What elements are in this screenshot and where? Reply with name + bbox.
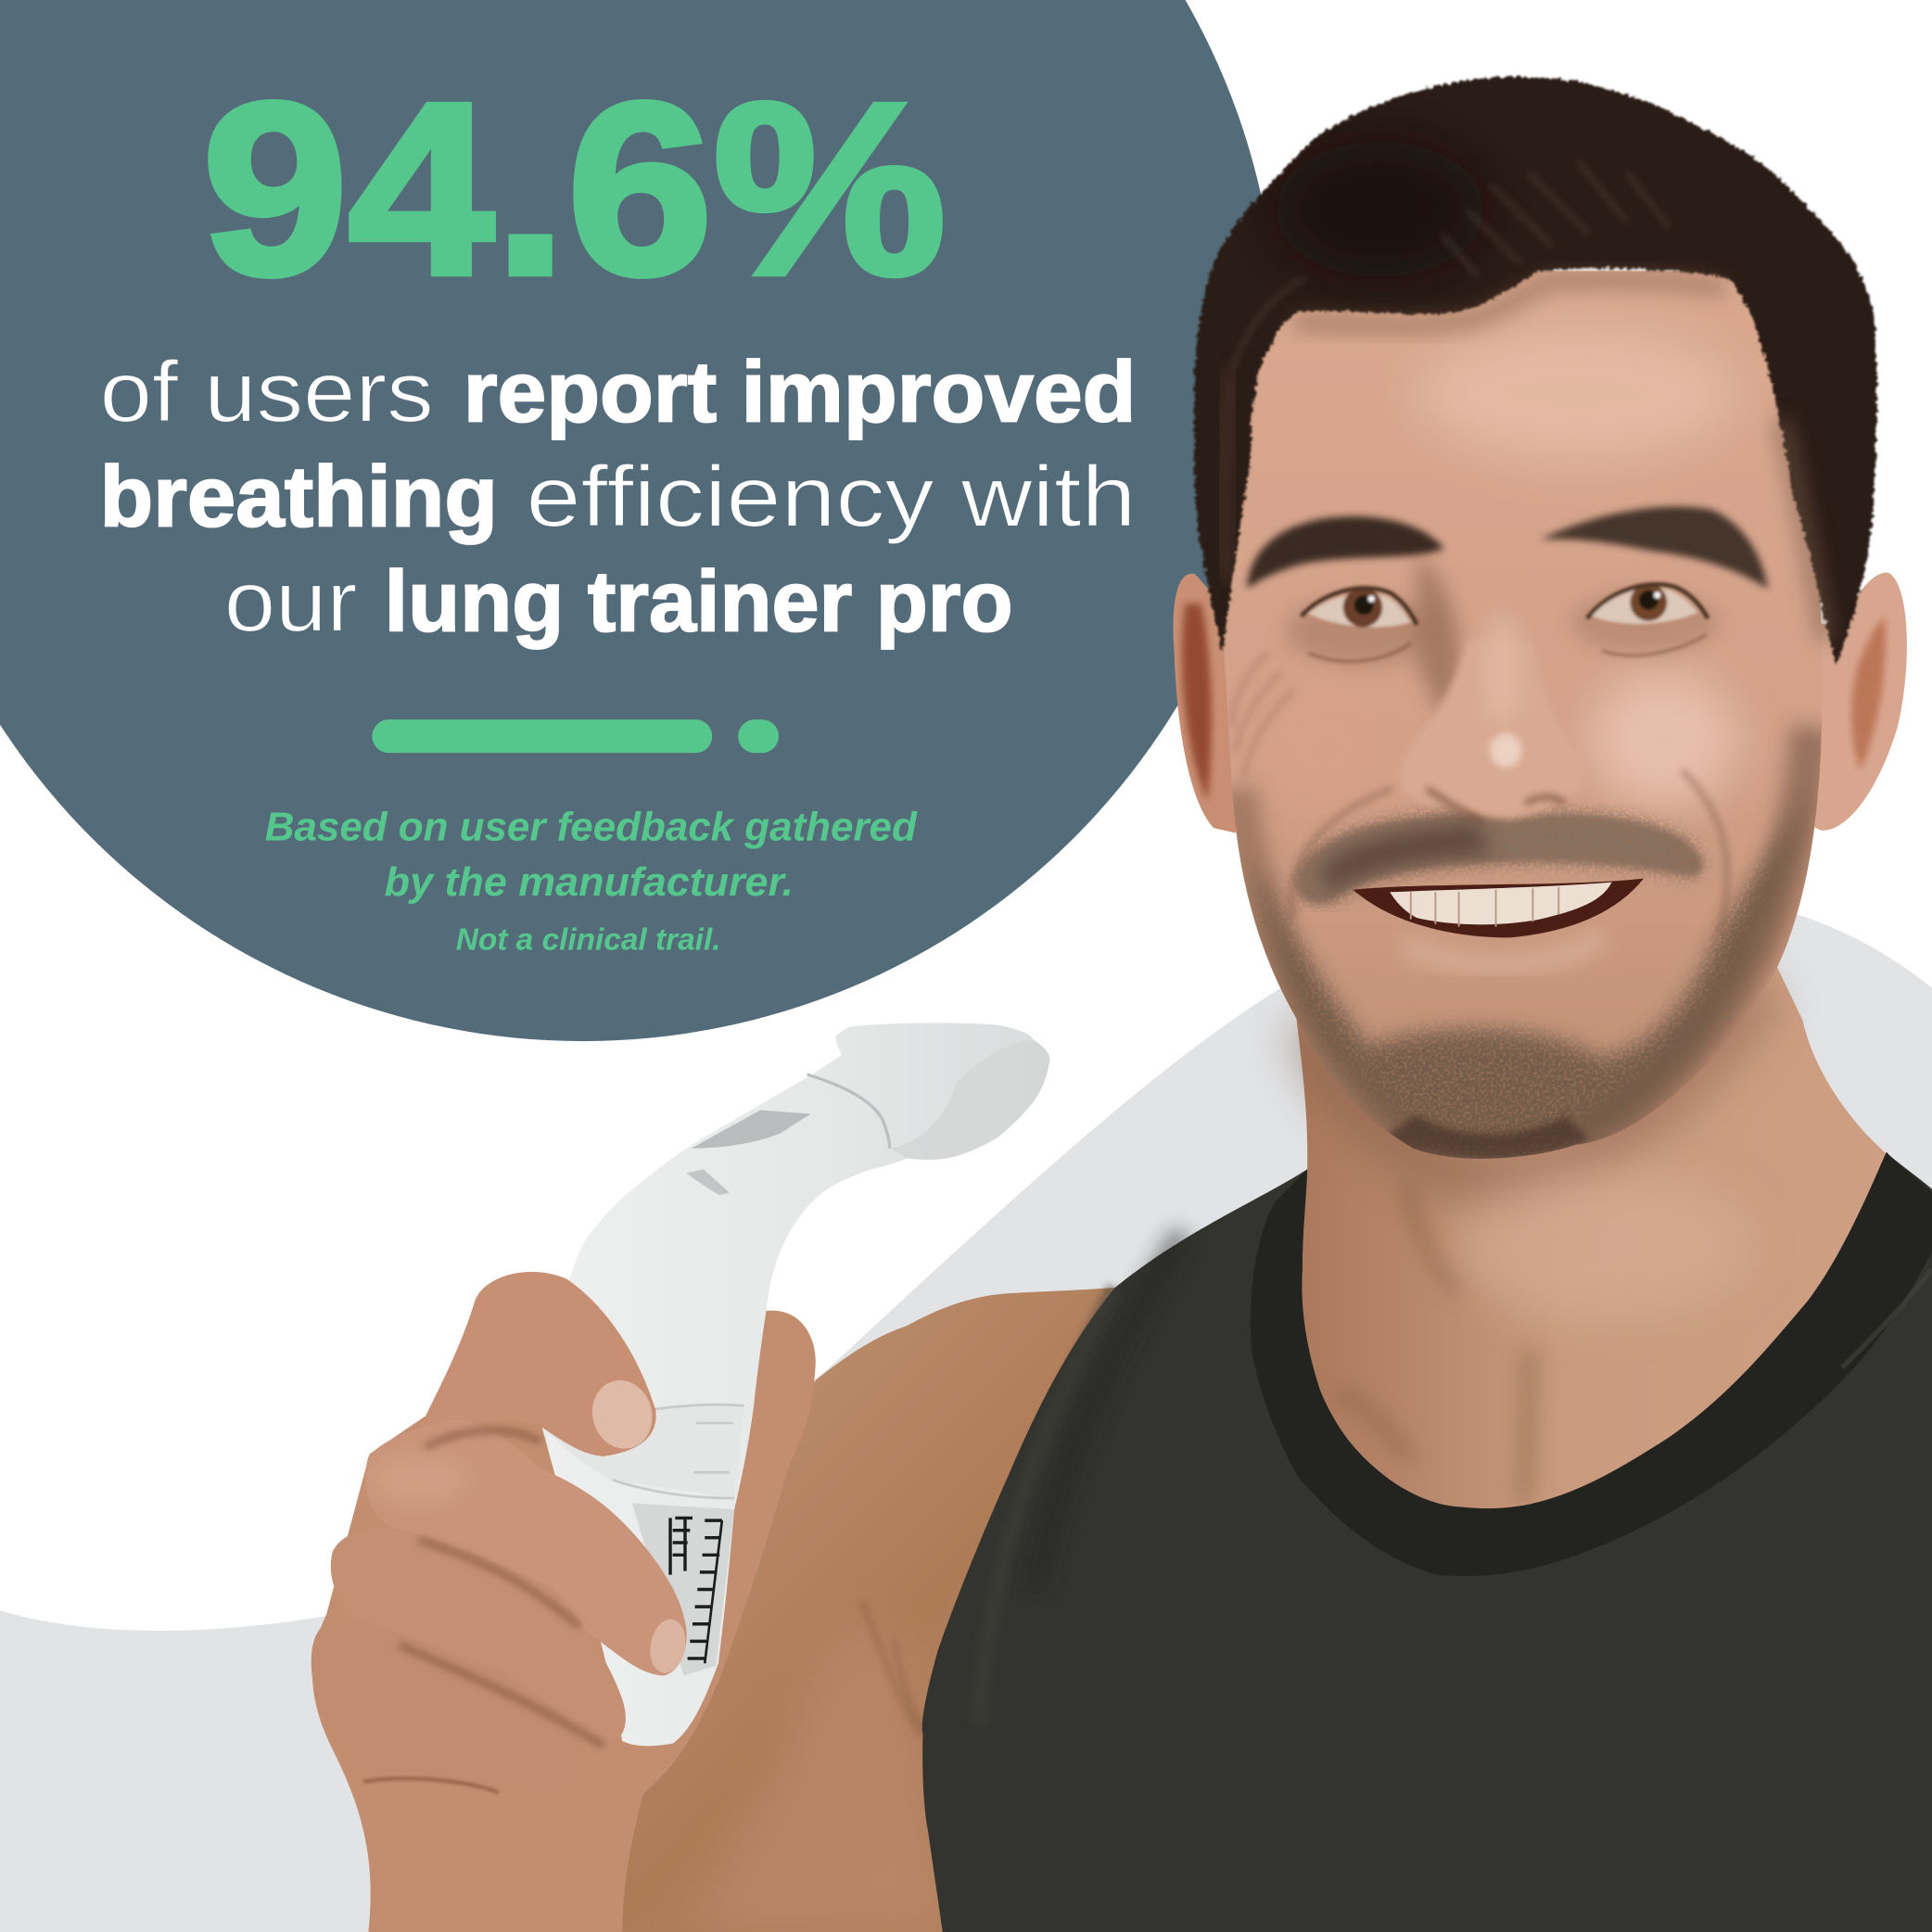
statement text: breathing — [100, 449, 498, 545]
statement text: efficiency with — [527, 449, 1136, 545]
disclaimer text — [265, 804, 918, 958]
device: slot — [686, 1169, 730, 1195]
man: smile — [1353, 879, 1644, 965]
man: right eye — [1587, 584, 1708, 655]
device: mouthpiece shading — [890, 1040, 1049, 1160]
device: lower band — [540, 1405, 744, 1498]
statement text: report improved — [464, 344, 1136, 440]
hand: fingers — [311, 1272, 690, 1797]
stubble — [1262, 833, 1781, 1159]
man: neck and chest — [1281, 961, 1903, 1540]
finger: index — [419, 1272, 656, 1456]
statement text — [100, 344, 1136, 649]
nail: index — [585, 1374, 660, 1455]
man: tank top — [922, 1152, 1932, 1932]
disclaimer text: Not a clinical trail. — [456, 923, 721, 958]
statement text: lung trainer pro — [385, 553, 1013, 649]
finger: ring — [331, 1528, 626, 1746]
man: ears — [1174, 573, 1907, 833]
statement text: our — [224, 553, 357, 649]
hair: shading and strands — [1224, 142, 1670, 579]
cheek tones — [1590, 671, 1737, 807]
device: collar seam — [807, 1074, 890, 1149]
nail: middle — [646, 1617, 690, 1676]
man: nose — [1399, 616, 1583, 820]
panel: dark circle — [0, 0, 1277, 1041]
side of jaw shade — [1239, 789, 1417, 1152]
finger: creases — [400, 1430, 604, 1746]
neck: shadow under jaw — [1306, 985, 1762, 1180]
hand: palm and thumb — [312, 1311, 816, 1932]
crow's feet — [1232, 653, 1294, 776]
hair: hairline fade — [1294, 280, 1725, 325]
man: left eyebrow — [1247, 516, 1444, 589]
man: right eyebrow — [1540, 506, 1768, 589]
finger: middle — [365, 1419, 687, 1676]
device: display window — [692, 1111, 811, 1149]
nasolabial folds — [1291, 789, 1392, 918]
headline statistic: 94.6% — [202, 53, 947, 326]
device: measurement scale — [632, 1503, 734, 1676]
moustache — [1296, 812, 1702, 903]
forehead highlight — [1417, 326, 1737, 462]
man: shoulder and arm — [591, 1288, 1232, 1932]
man: left eye — [1302, 588, 1417, 661]
man: face — [1219, 271, 1822, 1161]
statement text: of users — [100, 344, 434, 440]
device: lung trainer — [540, 1023, 1049, 1746]
eye socket shadows — [1417, 554, 1461, 739]
hair: temple fade — [1781, 419, 1826, 641]
man: hair — [1193, 77, 1877, 666]
disclaimer text: Based on user feedback gathered — [265, 804, 918, 849]
neck: sternal notch and chest lines — [1337, 1183, 1529, 1503]
divider: pill and dot — [372, 719, 779, 753]
finger: little — [311, 1619, 587, 1797]
disclaimer text: by the manufacturer. — [385, 859, 794, 905]
tank top: collar band — [1251, 1152, 1932, 1576]
background: grey swoosh — [0, 889, 1932, 1932]
